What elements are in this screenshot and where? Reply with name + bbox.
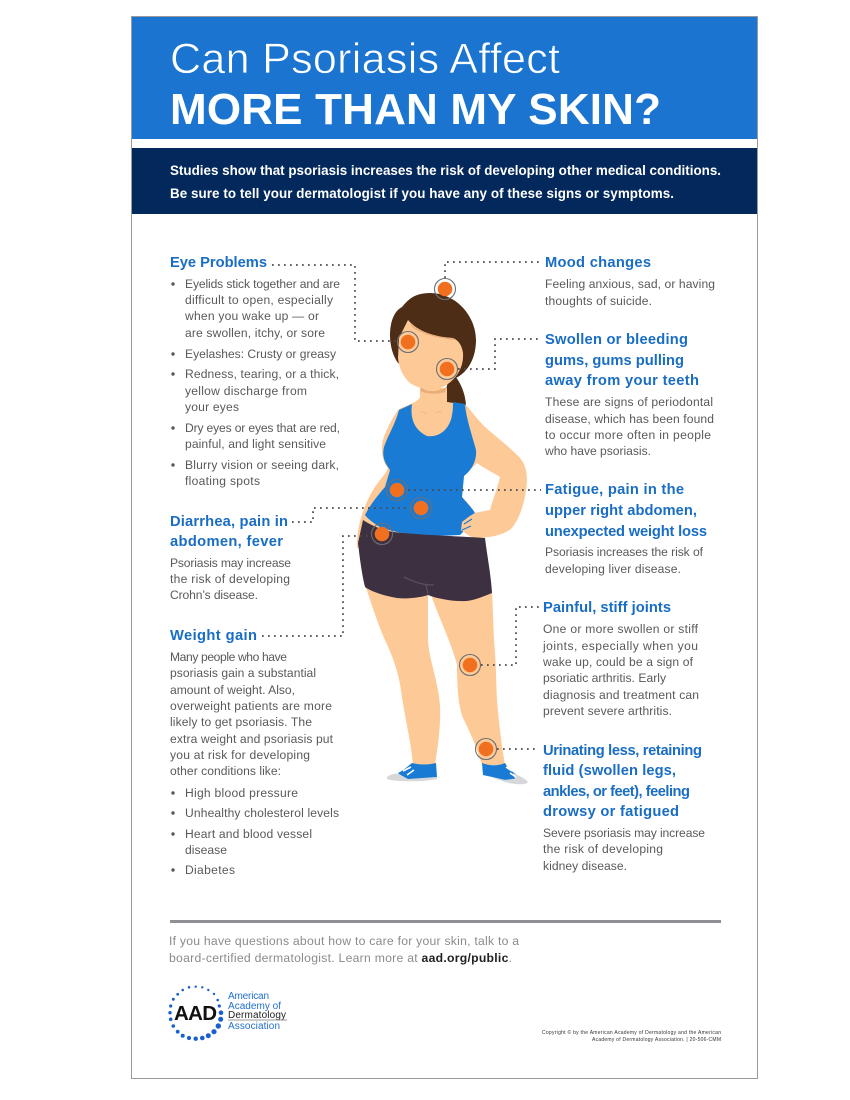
- face: [398, 320, 463, 389]
- intro banner: [132, 148, 757, 214]
- text block: fatigue: upper right abdomen,: [545, 503, 697, 519]
- text block: joints: [542, 600, 699, 718]
- text block: joints: psoriatic arthritis. Early: [543, 671, 667, 685]
- text block: mood changes: Mood changes: [545, 255, 651, 271]
- text block: eye problems: painful, and light sensitive: [185, 437, 326, 451]
- hand fingers: [461, 510, 490, 537]
- footer rule: [170, 920, 721, 923]
- text block: kidney: kidney disease.: [543, 859, 627, 873]
- text block: gums: disease, which has been found: [545, 412, 714, 426]
- copyright: Academy of Dermatology Association. | 20-506-CMM: [592, 1037, 721, 1043]
- text block: diarrhea: Diarrhea, pain in: [170, 514, 288, 530]
- shoes: [398, 763, 521, 780]
- text block: fatigue: unexpected weight loss: [545, 524, 707, 540]
- torso and arms skin: [357, 388, 527, 548]
- text block: kidney: Severe psoriasis may increase: [543, 826, 705, 840]
- text block: mood changes: Feeling anxious, sad, or having: [545, 277, 715, 291]
- text block: joints: Painful, stiff joints: [543, 600, 671, 616]
- text block: joints: prevent severe arthritis.: [543, 704, 672, 718]
- text block: gums: [544, 332, 714, 458]
- hair: [390, 293, 476, 385]
- text block: gums: away from your teeth: [545, 373, 699, 389]
- shorts seam: [404, 577, 434, 594]
- text block: fatigue: Fatigue, pain in the: [545, 482, 684, 498]
- header: title band: [132, 17, 757, 139]
- footer text: board-certified dermatologist. Learn more at aad.org/public.: [169, 951, 512, 965]
- shorts: [358, 520, 492, 601]
- text block: eye problems: your eyes: [185, 400, 239, 414]
- intro banner: Be sure to tell your dermatologist if you have any of these signs or symptoms.: [170, 186, 674, 201]
- text block: weight gain: you at risk for developing: [170, 748, 310, 762]
- copyright: [542, 1029, 721, 1043]
- text block: eye problems: yellow discharge from: [185, 384, 307, 398]
- footer text: If you have questions about how to care for your skin, talk to a: [169, 934, 519, 948]
- tank top: [365, 402, 476, 536]
- text block: eye problems: difficult to open, especially: [185, 293, 334, 307]
- text block: eye problems: when you wake up — or: [184, 309, 319, 323]
- text block: eye problems: [170, 255, 340, 488]
- text block: gums: who have psoriasis.: [544, 444, 651, 458]
- text block: joints: One or more swollen or stiff: [543, 622, 699, 636]
- text block: weight gain: likely to get psoriasis. The: [170, 715, 312, 729]
- text block: kidney: the risk of developing: [543, 842, 663, 856]
- text block: weight gain: extra weight and psoriasis put: [170, 732, 334, 746]
- text block: kidney: Urinating less, retaining: [543, 743, 702, 759]
- dotted connector lines: [262, 262, 541, 749]
- text block: diarrhea: Psoriasis may increase: [170, 556, 291, 570]
- logo: AAD: Dermatology: [228, 1010, 286, 1021]
- ponytail: [446, 374, 466, 405]
- text block: eye problems: floating spots: [185, 474, 260, 488]
- text block: diarrhea: Crohn’s disease.: [170, 588, 258, 602]
- text block: gums: to occur more often in people: [545, 428, 711, 442]
- symptom markers: [372, 278, 496, 760]
- text block: joints: wake up, could be a sign of: [542, 655, 694, 669]
- text block: weight gain: amount of weight. Also,: [170, 683, 295, 697]
- text block: kidney: drowsy or fatigued: [543, 804, 679, 820]
- text block: eye problems: Eye Problems: [170, 255, 267, 271]
- logo: AAD: Association: [228, 1021, 280, 1032]
- text block: mood changes: thoughts of suicide.: [545, 294, 652, 308]
- text block: weight gain: Heart and blood vessel: [185, 827, 312, 841]
- text block: diarrhea: the risk of developing: [170, 572, 290, 586]
- illustration: woman figure: [357, 293, 528, 784]
- text block: eye problems: are swollen, itchy, or sore: [185, 326, 325, 340]
- text block: fatigue: [545, 482, 707, 576]
- text block: weight gain: Many people who have: [170, 650, 287, 664]
- text block: mood changes: [545, 255, 715, 308]
- text block: eye problems: Eyelashes: Crusty or greasy: [185, 347, 337, 361]
- text block: weight gain: Weight gain: [170, 628, 257, 644]
- neck shadow and collarbones: [420, 388, 446, 414]
- title line 1: Can Psoriasis Affect: [170, 35, 560, 83]
- text block: weight gain: psoriasis gain a substantial: [170, 666, 316, 680]
- logo: AAD: AAD: [174, 1002, 217, 1025]
- text block: diarrhea: [170, 514, 291, 602]
- text block: weight gain: Diabetes: [185, 863, 235, 877]
- text block: weight gain: Unhealthy cholesterol levels: [185, 806, 339, 820]
- text block: eye problems: Dry eyes or eyes that are red,: [185, 421, 340, 435]
- logo: AAD: Academy of: [228, 1001, 281, 1012]
- text block: kidney: fluid (swollen legs,: [543, 763, 676, 779]
- hairline shadow: [410, 323, 455, 340]
- text block: joints: joints, especially when you: [542, 639, 698, 653]
- text block: gums: These are signs of periodontal: [545, 395, 713, 409]
- copyright: Copyright © by the American Academy of Dermatology and the American: [542, 1029, 721, 1036]
- footer text: [169, 934, 519, 965]
- logo: AAD: [168, 986, 287, 1041]
- text block: weight gain: [170, 628, 339, 877]
- title line 2: MORE THAN MY SKIN?: [170, 85, 661, 134]
- panel: poster background: [132, 16, 758, 1078]
- text block: weight gain: disease: [185, 843, 227, 857]
- text block: eye problems: Blurry vision or seeing dark,: [185, 458, 339, 472]
- text block: fatigue: Psoriasis increases the risk of: [545, 545, 704, 559]
- logo: AAD: American: [228, 991, 269, 1002]
- text block: weight gain: other conditions like:: [170, 764, 281, 778]
- text block: fatigue: developing liver disease.: [545, 562, 681, 576]
- text block: joints: diagnosis and treatment can: [543, 688, 699, 702]
- intro banner: Studies show that psoriasis increases the risk of developing other medical conditions.: [170, 163, 721, 178]
- hip gap: [462, 463, 500, 513]
- text block: diarrhea: abdomen, fever: [170, 534, 283, 550]
- legs: [365, 585, 505, 765]
- text block: kidney: [543, 743, 705, 873]
- text block: eye problems: Eyelids stick together and are: [185, 277, 340, 291]
- text block: gums: Swollen or bleeding: [545, 332, 688, 348]
- text block: weight gain: overweight patients are more: [170, 699, 332, 713]
- text block: weight gain: High blood pressure: [185, 786, 298, 800]
- text block: eye problems: Redness, tearing, or a thick,: [185, 367, 339, 381]
- text block: gums: gums, gums pulling: [545, 353, 684, 369]
- text block: kidney: ankles, or feet), feeling: [543, 784, 690, 800]
- logo dot ring: [168, 986, 223, 1041]
